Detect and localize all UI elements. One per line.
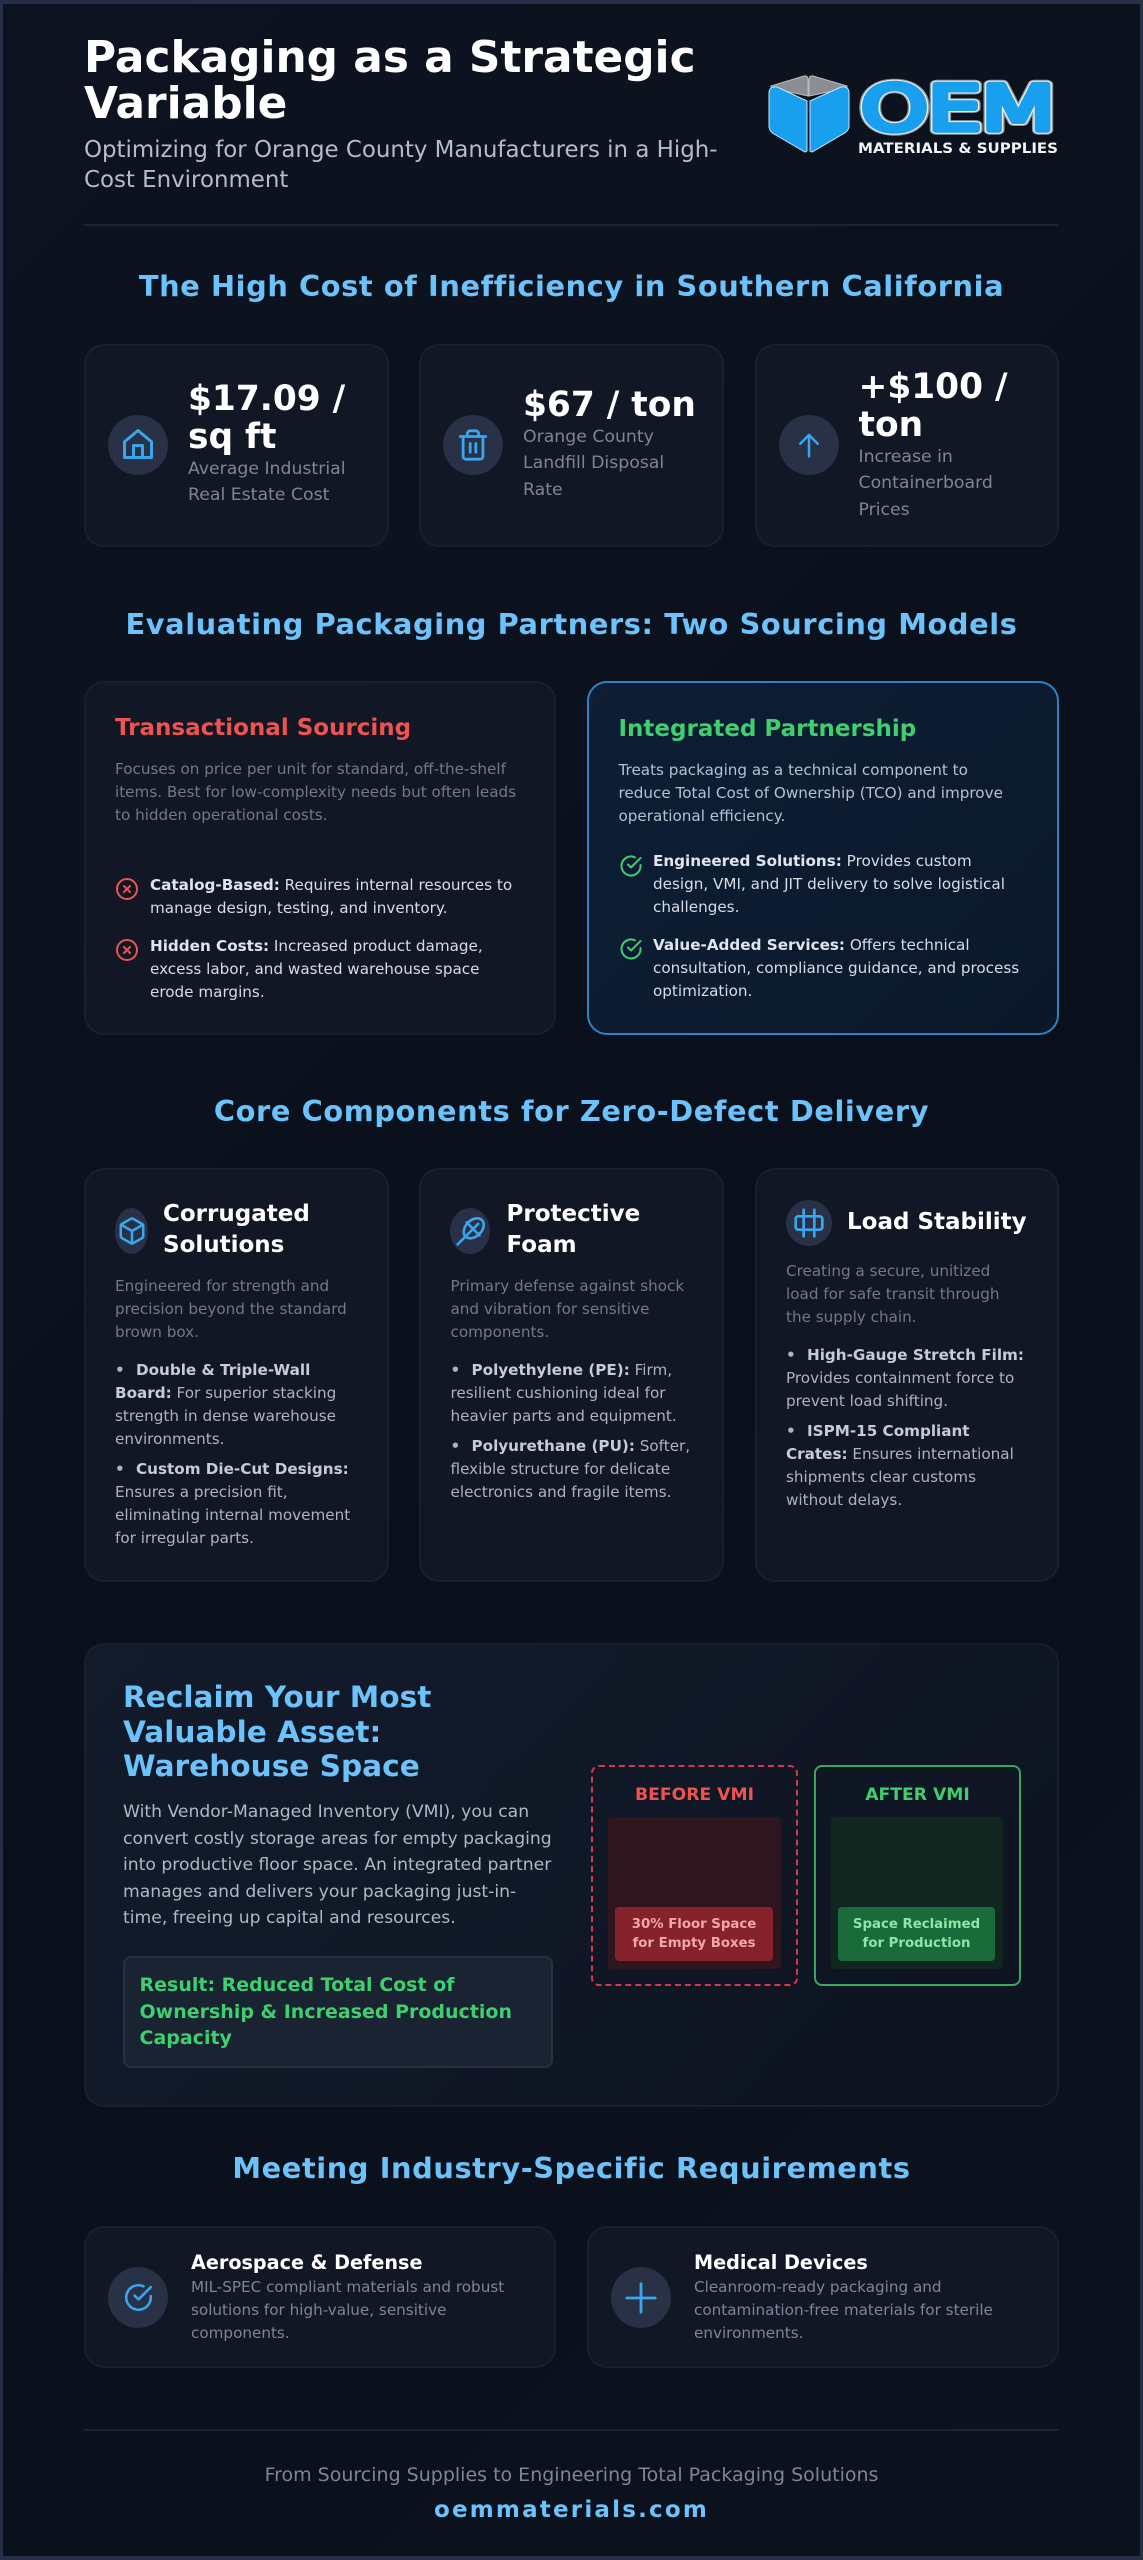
description: Engineered for strength and xyxy=(115,1277,329,1295)
list item: challenges. xyxy=(653,898,739,916)
heading: Valuable Asset: xyxy=(123,1715,381,1749)
description: to hidden operational costs. xyxy=(115,806,328,824)
description: components. xyxy=(450,1323,549,1341)
list item: Hidden Costs: Increased product damage, xyxy=(150,937,483,955)
list item: Catalog-Based: Requires internal resources to xyxy=(150,876,512,894)
logo cube xyxy=(769,76,849,152)
icon: arrow up xyxy=(778,415,838,475)
panel: warehouse space xyxy=(84,1643,1059,2107)
list item xyxy=(653,852,1005,916)
stat text: ton xyxy=(858,405,923,445)
bullet: Provides containment force to xyxy=(786,1369,1014,1387)
bullet: electronics and fragile items. xyxy=(450,1483,671,1501)
stat text: Rate xyxy=(523,480,563,500)
list item: consultation, compliance guidance, and process xyxy=(653,959,1019,977)
bullet xyxy=(786,1422,1014,1509)
bullet: • xyxy=(786,1346,796,1364)
bullet: environments. xyxy=(115,1430,224,1448)
floor label: for Empty Boxes xyxy=(632,1936,756,1951)
icon: load frame xyxy=(786,1200,832,1246)
description: load for safe transit through xyxy=(786,1285,999,1303)
card title xyxy=(163,1201,310,1258)
icon: trash xyxy=(443,415,503,475)
stat text: $17.09 / xyxy=(188,379,345,419)
list item: optimization. xyxy=(653,982,752,1000)
bullet xyxy=(115,1361,336,1448)
panel: stat containerboard xyxy=(754,344,1059,547)
description: Creating a secure, unitized xyxy=(786,1262,990,1280)
heading: Warehouse Space xyxy=(123,1749,420,1783)
floor area xyxy=(608,1817,781,1969)
icon: x circle xyxy=(116,939,138,961)
card title: Load Stability xyxy=(847,1209,1027,1235)
bullet: High-Gauge Stretch Film: xyxy=(807,1346,1024,1364)
panel: transactional sourcing xyxy=(84,681,556,1035)
bullet: • xyxy=(115,1460,125,1478)
bullet xyxy=(450,1437,690,1501)
bullet: Crates: Ensures international xyxy=(786,1445,1014,1463)
subtitle xyxy=(84,137,718,193)
floor label: Space Reclaimed xyxy=(853,1917,980,1932)
label: AFTER VMI xyxy=(865,1785,970,1805)
floor label xyxy=(838,1907,995,1961)
bullet: flexible structure for delicate xyxy=(450,1460,670,1478)
card title: Corrugated xyxy=(163,1201,310,1227)
panel: aerospace xyxy=(84,2226,556,2368)
stat text xyxy=(858,367,1008,520)
bullet: strength in dense warehouse xyxy=(115,1407,336,1425)
body text: With Vendor-Managed Inventory (VMI), you can xyxy=(123,1802,529,1822)
list item: excess labor, and wasted warehouse space xyxy=(150,960,479,978)
list item xyxy=(150,876,512,917)
bullet: • xyxy=(115,1361,125,1379)
description: environments. xyxy=(694,2324,803,2342)
card title xyxy=(506,1201,640,1258)
list item: manage design, testing, and inventory. xyxy=(150,899,448,917)
icon: check circle xyxy=(620,855,642,876)
bullet: • xyxy=(450,1361,460,1379)
description: components. xyxy=(191,2324,290,2342)
floor area xyxy=(831,1817,1003,1969)
panel: stat landfill xyxy=(419,344,724,547)
description: Focuses on price per unit for standard, off-the-shelf xyxy=(115,760,506,778)
description xyxy=(115,760,516,824)
stat text: Orange County xyxy=(523,427,654,447)
stat text: Average Industrial xyxy=(188,459,346,479)
description: solutions for high-value, sensitive xyxy=(191,2301,446,2319)
description xyxy=(694,2278,993,2342)
heading: Integrated Partnership xyxy=(618,716,916,742)
bullet: Polyethylene (PE): Firm, xyxy=(472,1361,672,1379)
card title: Foam xyxy=(506,1232,577,1258)
stat text xyxy=(523,385,696,500)
floor label: for Production xyxy=(863,1936,970,1951)
footer xyxy=(265,2464,878,2523)
stat text: Real Estate Cost xyxy=(188,485,329,505)
description xyxy=(191,2278,504,2342)
list item: Value-Added Services: Offers technical xyxy=(653,936,970,954)
description: brown box. xyxy=(115,1323,199,1341)
list item xyxy=(653,936,1019,1000)
icon: house xyxy=(108,415,168,475)
body text: convert costly storage areas for empty packaging xyxy=(123,1829,552,1849)
panel: stat real estate xyxy=(84,344,388,547)
result callout xyxy=(123,1956,553,2068)
stat text: $67 / ton xyxy=(523,385,696,425)
list item: erode margins. xyxy=(150,983,265,1001)
logo tagline: MATERIALS & SUPPLIES xyxy=(858,141,1058,157)
subtitle: Cost Environment xyxy=(84,167,288,193)
result text xyxy=(140,1974,512,2049)
list item xyxy=(150,937,483,1001)
heading: Transactional Sourcing xyxy=(115,715,411,741)
stat text xyxy=(188,379,346,505)
floor label: 30% Floor Space xyxy=(632,1917,756,1932)
bullet: Custom Die-Cut Designs: xyxy=(136,1460,349,1478)
logo xyxy=(768,74,1058,157)
stat text: Containerboard xyxy=(858,473,993,493)
panel: load stability xyxy=(754,1168,1059,1582)
heading: industries: Meeting Industry-Specific Requirements xyxy=(232,2151,911,2185)
stat text: Landfill Disposal xyxy=(523,453,664,473)
bullet: Ensures a precision fit, xyxy=(115,1483,288,1501)
body text: into productive floor space. An integrated partner xyxy=(123,1855,551,1875)
list item: Engineered Solutions: Provides custom xyxy=(653,852,972,870)
bullet: • xyxy=(450,1437,460,1455)
description xyxy=(115,1277,347,1341)
description: items. Best for low-complexity needs but often leads xyxy=(115,783,516,801)
logo wordmark: OEM xyxy=(861,74,1055,145)
description: contamination-free materials for sterile xyxy=(694,2301,993,2319)
stat text: Prices xyxy=(858,500,910,520)
bullet: Double & Triple-Wall xyxy=(136,1361,310,1379)
subtitle: Optimizing for Orange County Manufacturers in a High- xyxy=(84,137,718,163)
icon: check circle xyxy=(108,2267,168,2328)
heading: high cost: The High Cost of Inefficiency in Southern California xyxy=(139,269,1004,303)
website: oemmaterials.com xyxy=(434,2497,709,2523)
icon: check circle xyxy=(620,938,642,960)
body text xyxy=(123,1802,552,1928)
description: MIL-SPEC compliant materials and robust xyxy=(191,2278,504,2296)
panel: corrugated solutions xyxy=(84,1168,388,1582)
bullet: Polyurethane (PU): Softer, xyxy=(472,1437,690,1455)
logo wordmark: OEM xyxy=(861,74,1055,145)
result text: Result: Reduced Total Cost of xyxy=(140,1974,455,1996)
panel: protective foam xyxy=(419,1168,724,1582)
stat text: +$100 / xyxy=(858,367,1008,407)
body text: manages and delivers your packaging just-in- xyxy=(123,1882,516,1902)
heading: partners: Evaluating Packaging Partners: Two Sourcing Models xyxy=(126,607,1017,641)
tagline: From Sourcing Supplies to Engineering Total Packaging Solutions xyxy=(265,2464,878,2486)
bullet: eliminating internal movement xyxy=(115,1506,350,1524)
result text: Ownership & Increased Production xyxy=(140,2001,512,2023)
label: BEFORE VMI xyxy=(635,1785,754,1805)
description: operational efficiency. xyxy=(618,807,785,825)
heading xyxy=(123,1680,431,1783)
card title: Medical Devices xyxy=(694,2251,868,2274)
heading: Reclaim Your Most xyxy=(123,1680,431,1714)
icon: plus xyxy=(611,2267,671,2328)
description: Cleanroom-ready packaging and xyxy=(694,2278,942,2296)
icon: leaf foam xyxy=(450,1208,490,1254)
stat text: sq ft xyxy=(188,417,276,457)
panel: integrated partnership xyxy=(587,681,1059,1035)
logo wordmark: OEM xyxy=(861,74,1055,145)
heading: core components: Core Components for Zero-Defect Delivery xyxy=(214,1094,929,1128)
description: precision beyond the standard xyxy=(115,1300,347,1318)
title: Variable xyxy=(84,78,287,129)
card title: Aerospace & Defense xyxy=(191,2251,422,2274)
list item: design, VMI, and JIT delivery to solve logistical xyxy=(653,875,1005,893)
description xyxy=(450,1277,684,1341)
body text: time, freeing up capital and resources. xyxy=(123,1908,456,1928)
bullet: shipments clear customs xyxy=(786,1468,976,1486)
diagram: after VMI xyxy=(814,1765,1021,1986)
description: the supply chain. xyxy=(786,1308,917,1326)
description: reduce Total Cost of Ownership (TCO) and improve xyxy=(618,784,1003,802)
bullet: resilient cushioning ideal for xyxy=(450,1384,665,1402)
card title: Solutions xyxy=(163,1232,284,1258)
title: Packaging as a Strategic xyxy=(84,32,696,83)
header xyxy=(84,32,1058,193)
title xyxy=(84,32,696,129)
bullet: without delays. xyxy=(786,1491,902,1509)
bullet xyxy=(450,1361,677,1425)
icon: x circle xyxy=(116,878,138,900)
bullet: prevent load shifting. xyxy=(786,1392,948,1410)
bullet: ISPM-15 Compliant xyxy=(807,1422,970,1440)
description: Treats packaging as a technical component to xyxy=(618,761,968,779)
bullet xyxy=(786,1346,1024,1410)
description xyxy=(786,1262,999,1326)
description: and vibration for sensitive xyxy=(450,1300,649,1318)
bullet: Board: For superior stacking xyxy=(115,1384,336,1402)
bullet: for irregular parts. xyxy=(115,1529,254,1547)
description xyxy=(618,761,1003,825)
floor label xyxy=(615,1907,773,1961)
bullet: • xyxy=(786,1422,796,1440)
description: Primary defense against shock xyxy=(450,1277,684,1295)
panel: medical xyxy=(587,2226,1059,2368)
result text: Capacity xyxy=(140,2027,232,2049)
icon: box xyxy=(115,1208,148,1254)
bullet xyxy=(115,1460,350,1547)
bullet: heavier parts and equipment. xyxy=(450,1407,677,1425)
diagram: before VMI xyxy=(591,1765,798,1986)
stat text: Increase in xyxy=(858,447,953,467)
card title: Protective xyxy=(506,1201,640,1227)
